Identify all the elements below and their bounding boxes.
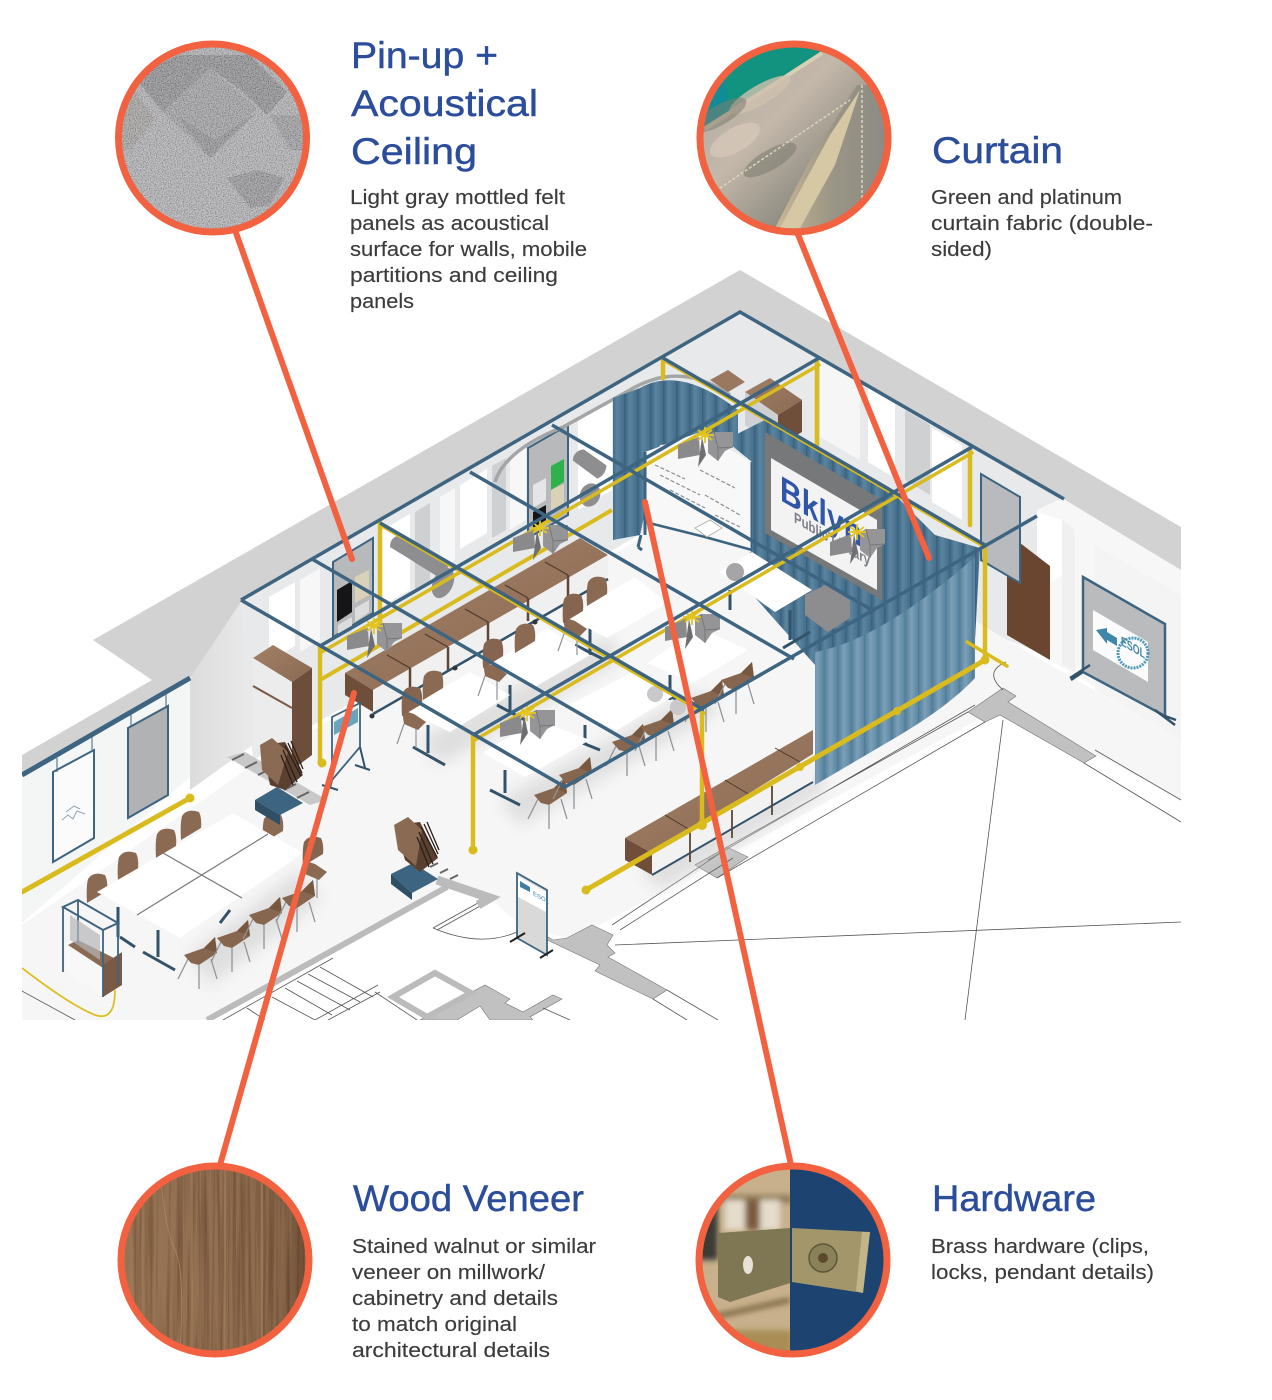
heading (351, 35, 538, 172)
swatch ring (700, 44, 888, 232)
left wall (22, 678, 190, 923)
heading: Ceiling (351, 131, 477, 172)
screen logo: Bklyn (780, 469, 862, 556)
wall caps (22, 270, 1181, 778)
description: surface for walls, mobile (350, 239, 587, 261)
floor shadows (190, 635, 825, 985)
presentation screen (765, 432, 882, 600)
yellow floor cable (22, 968, 115, 1016)
swatch ring (121, 1166, 309, 1354)
back curtain (613, 380, 738, 540)
felt swatch (118, 44, 310, 234)
front bench millwork (625, 730, 813, 875)
rolling storage cart (63, 900, 122, 997)
callout: hardware (645, 502, 1154, 1360)
rear screen curtain (725, 420, 980, 665)
leader line (797, 232, 929, 558)
small sign left (322, 703, 370, 790)
back right wall (740, 314, 1060, 660)
description (931, 187, 1153, 261)
screen subtitle: Public Library (794, 509, 870, 570)
description (352, 1236, 596, 1362)
mobile partition ESOL (1070, 577, 1176, 725)
callout: wood veneer (120, 693, 596, 1362)
heading: Pin-up + (351, 35, 498, 76)
description: to match original (352, 1314, 517, 1336)
heading: Curtain (932, 130, 1063, 171)
back right windows (820, 360, 962, 520)
heading: Acoustical (351, 83, 538, 124)
description: partitions and ceiling (350, 265, 558, 287)
wood swatch (120, 1165, 310, 1355)
description (931, 1236, 1154, 1284)
right wall with pier (1037, 498, 1181, 740)
description (350, 187, 587, 313)
front curtain (815, 557, 975, 785)
sign label: ESOL (533, 890, 549, 906)
swatch ring (699, 1166, 887, 1354)
small sign ESOL (510, 873, 553, 958)
left return wall (190, 602, 252, 790)
curtain track (495, 376, 730, 482)
armchair (726, 563, 850, 632)
brass hardware swatch (696, 1165, 894, 1360)
large meeting table (87, 811, 327, 989)
pipe fittings (186, 656, 990, 894)
swatch ring (118, 44, 306, 232)
whiteboard (638, 432, 752, 550)
description: Stained walnut or similar (352, 1236, 596, 1258)
pendant lights (347, 427, 885, 745)
back wall yellow pipe (320, 510, 612, 680)
floor (22, 480, 1181, 1020)
round pendants (390, 449, 686, 715)
partition label: ESOL (1121, 633, 1145, 662)
plan linework (20, 662, 1181, 1020)
wall felt panel (981, 474, 1020, 583)
description: architectural details (352, 1340, 550, 1362)
millwork along back wall (345, 538, 608, 718)
tall storage cabinet (253, 645, 312, 770)
heading: Hardware (932, 1178, 1096, 1219)
description: curtain fabric (double- (931, 213, 1153, 235)
back storage cabinets (710, 370, 802, 434)
ceiling frame grid (22, 312, 1064, 787)
back wall felt panels (333, 425, 568, 638)
leader line (220, 693, 354, 1165)
tables (405, 552, 812, 805)
description: sided) (931, 239, 992, 261)
curtain fabric swatch (689, 40, 890, 234)
description: veneer on millwork/ (352, 1262, 545, 1284)
description: panels as acoustical (350, 213, 549, 235)
callout: pin-up and acoustical ceiling (118, 35, 587, 559)
chair stack cart one (255, 738, 303, 825)
yellow piping (22, 358, 1007, 892)
leader line (645, 502, 791, 1165)
leader line (235, 230, 352, 559)
heading: Wood Veneer (353, 1178, 584, 1219)
description: Green and platinum (931, 187, 1122, 209)
description: panels (350, 291, 414, 313)
chair stack cart two (391, 817, 439, 900)
description: Light gray mottled felt (350, 187, 565, 209)
door (1007, 533, 1050, 660)
axonometric plan illustration (20, 270, 1181, 1020)
left wall panels (53, 692, 168, 862)
description: locks, pendant details) (931, 1262, 1154, 1284)
classroom chairs (397, 577, 754, 829)
callout: curtain (689, 40, 1153, 558)
description: Brass hardware (clips, (931, 1236, 1149, 1258)
back left wall (241, 314, 740, 760)
description: cabinetry and details (352, 1288, 558, 1310)
back left windows (269, 398, 612, 661)
